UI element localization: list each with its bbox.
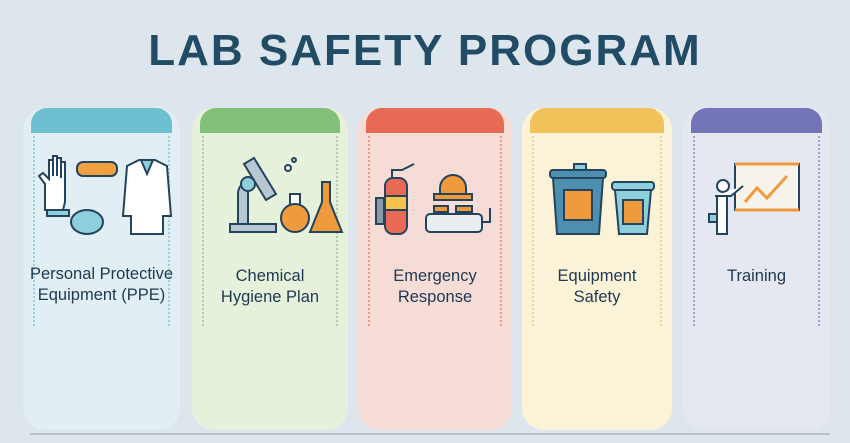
label (558, 267, 636, 306)
label: Response (398, 288, 472, 306)
icon: microscope & flasks (229, 156, 344, 233)
panel: chemical hygiene (192, 108, 348, 430)
label: Emergency (393, 267, 477, 285)
panel: equipment safety (522, 108, 672, 430)
label (221, 267, 319, 306)
icon: extinguisher, alarm, hotplate (375, 163, 491, 235)
title: LAB SAFETY PROGRAM (148, 26, 702, 75)
label: Training (727, 267, 786, 285)
label: Chemical (236, 267, 304, 285)
label: Safety (574, 288, 620, 306)
panel: PPE (23, 108, 180, 430)
icon: PPE (38, 155, 172, 235)
label: Equipment (PPE) (38, 286, 165, 304)
icon: presenter (708, 162, 800, 235)
label: Personal Protective (30, 265, 173, 283)
label (30, 265, 173, 304)
label: Equipment (558, 267, 636, 285)
icon: bins (549, 163, 655, 235)
panel: emergency (358, 108, 512, 430)
label (393, 267, 477, 306)
panel: training (683, 108, 830, 430)
label: Hygiene Plan (221, 288, 319, 306)
